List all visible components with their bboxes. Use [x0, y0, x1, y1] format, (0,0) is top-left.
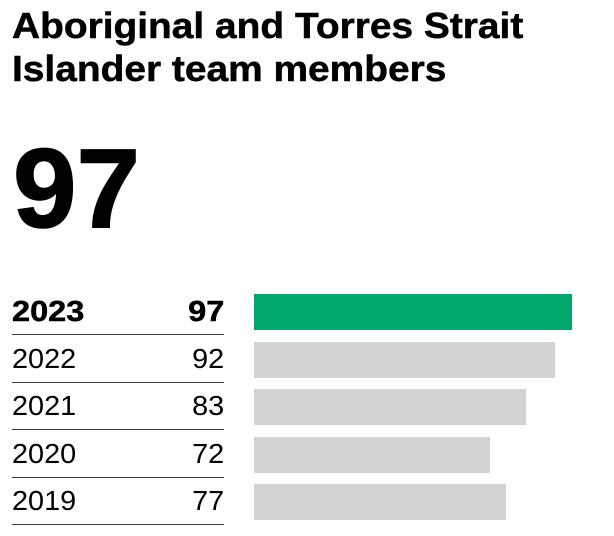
row: 2023 — [12, 294, 572, 335]
title: Aboriginal and Torres Strait — [12, 5, 523, 46]
row: 2021: 2021 — [12, 390, 76, 421]
bar chart table — [12, 294, 572, 525]
row: 2020 — [12, 437, 490, 478]
title: Islander team members — [12, 48, 446, 89]
row: 2022: 92 — [192, 342, 224, 374]
row: 2021: 83 — [192, 390, 224, 421]
row: 2019: 2019 — [12, 485, 76, 516]
row: 2019 — [12, 484, 506, 525]
headline number: 97 — [12, 126, 140, 251]
row: 2023: 2023 — [12, 296, 84, 328]
row: 2020: 2020 — [12, 438, 76, 468]
row: 2019: 77 — [192, 485, 224, 516]
row: 2021 — [12, 389, 526, 430]
title — [12, 5, 524, 89]
row: 2020: 72 — [192, 438, 224, 468]
row: 2022 — [12, 342, 555, 383]
row: 2022: 2022 — [12, 342, 76, 374]
row: 2023: 97 — [188, 296, 224, 328]
